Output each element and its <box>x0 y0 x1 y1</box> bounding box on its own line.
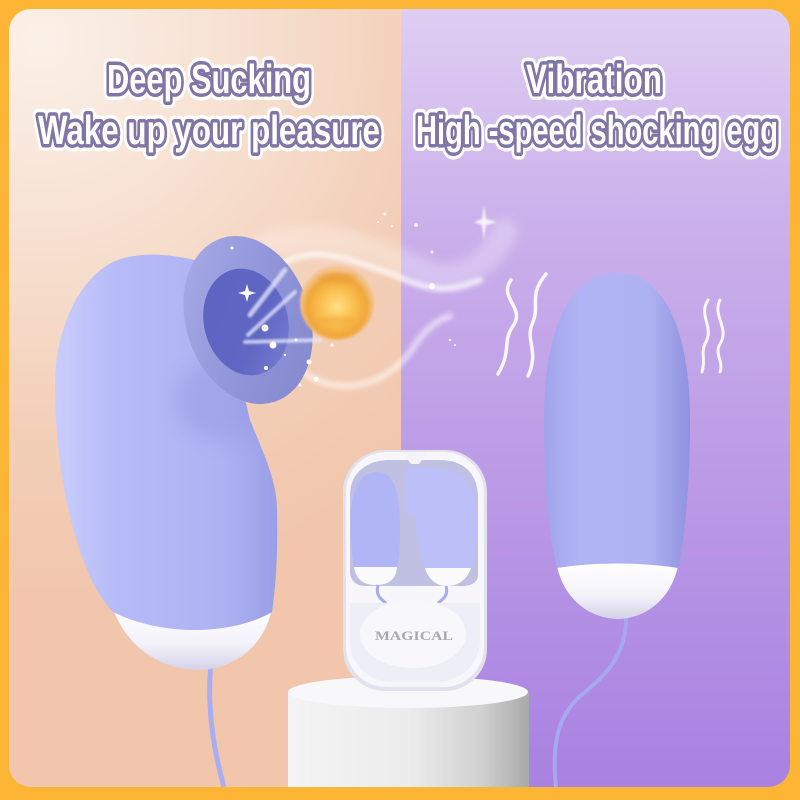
pedestal <box>288 676 529 787</box>
light streaks <box>245 270 320 342</box>
panel: lavender right side <box>401 9 790 787</box>
suction inner opening <box>192 259 300 385</box>
white end cap <box>557 562 678 619</box>
product: egg vibrator <box>544 273 690 787</box>
heading: deep sucking: Wake up your pleasure <box>38 107 380 153</box>
heading: vibration <box>416 56 778 153</box>
oval badge with label: MAGICAL <box>375 628 453 643</box>
loop cable <box>377 585 447 603</box>
cable <box>210 665 224 787</box>
icon: vibration lines left <box>498 274 546 376</box>
heading: deep sucking: Deep Sucking <box>107 56 311 102</box>
mini egg <box>351 472 400 568</box>
cable <box>555 612 626 787</box>
heading: deep sucking: Wake up your pleasure <box>38 107 380 153</box>
icon: golden ball <box>300 266 374 340</box>
case inner cavity <box>350 460 478 586</box>
body shading under head <box>178 368 252 436</box>
wisps: suction swirl <box>268 232 505 386</box>
icon: vibration lines right <box>702 300 723 372</box>
sparkles: right swirl <box>377 205 497 346</box>
product: storage case <box>343 450 487 691</box>
heading: deep sucking: Deep Sucking <box>107 56 311 102</box>
panel: peach left side <box>9 9 401 787</box>
egg body <box>544 273 690 568</box>
product: suction device <box>55 219 334 787</box>
heading: vibration: Vibration <box>526 56 662 102</box>
main body <box>55 255 277 630</box>
mini suction device <box>405 467 477 570</box>
lid tray <box>350 603 480 682</box>
white end cap <box>113 606 272 670</box>
heading: vibration: Vibration <box>526 56 662 102</box>
oval badge with label <box>360 600 466 668</box>
suction head <box>162 219 334 421</box>
case top notch <box>402 452 428 464</box>
sparkles <box>230 246 334 386</box>
heading: deep sucking <box>38 56 380 153</box>
